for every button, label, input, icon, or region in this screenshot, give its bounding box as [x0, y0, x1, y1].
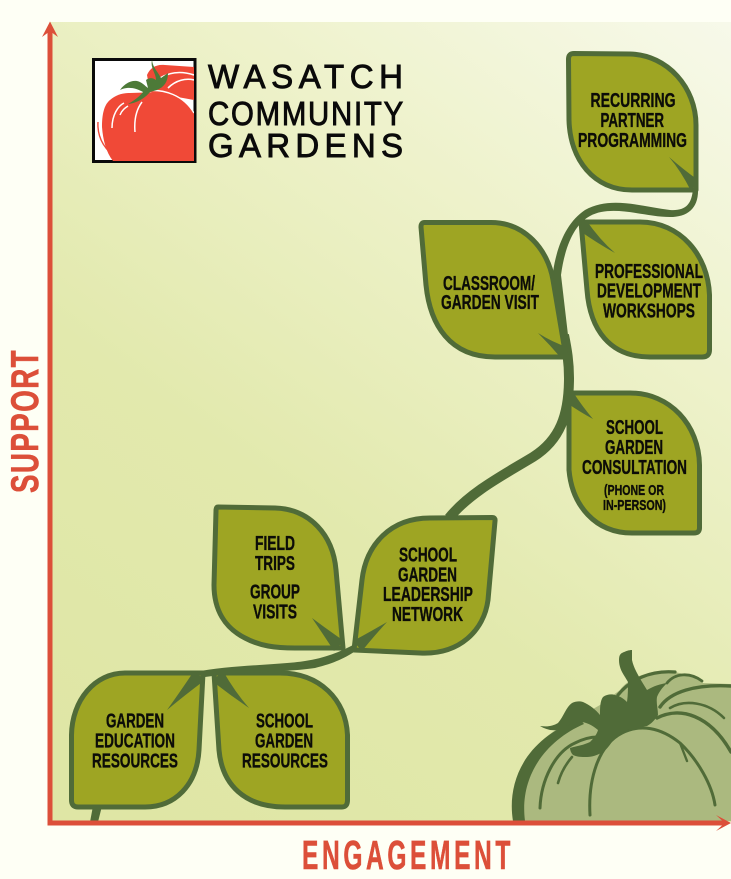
- logo tomato mark: [94, 60, 195, 162]
- leaf: garden education resources: EDUCATION: [95, 730, 175, 752]
- leaf: school garden resources: [212, 671, 348, 807]
- leaf: school garden leadership network: [353, 518, 495, 653]
- leaf: school garden leadership network: SCHOOL: [399, 544, 457, 566]
- leaf: field trips and group visits: [214, 507, 344, 651]
- leaf: field trips and group visits: TRIPS: [255, 553, 295, 575]
- vertical axis arrow: [42, 22, 58, 826]
- leaf: school garden leadership network: GARDEN: [398, 564, 457, 586]
- logo wordmark: COMMUNITY: [208, 95, 405, 132]
- leaf: school garden resources: GARDEN: [255, 730, 313, 752]
- pumpkin ribs and outline: [512, 672, 731, 821]
- pumpkin stem and calyx: [540, 650, 667, 757]
- vine stem: lower connector: [195, 644, 357, 677]
- vine stem: upper connector: [553, 188, 698, 335]
- axis label: support: SUPPORT: [4, 349, 47, 493]
- logo: [94, 58, 405, 164]
- vine stem: middle section to leadership leaf: [449, 335, 569, 518]
- leaf: school garden consultation: SCHOOL: [606, 417, 663, 439]
- leaf: garden education resources: [72, 671, 205, 807]
- leaf: school garden leadership network: NETWORK: [392, 604, 463, 626]
- logo wordmark: [208, 58, 405, 164]
- vine stem: base stub: [90, 806, 102, 822]
- leaf: school garden consultation: [567, 392, 700, 533]
- leaf: school garden resources: SCHOOL: [256, 710, 313, 732]
- leaf: school garden consultation: GARDEN: [605, 437, 663, 459]
- leaf: garden education resources: RESOURCES: [92, 750, 178, 772]
- axis label: engagement: ENGAGEMENT: [302, 832, 514, 878]
- leaf: classroom / garden visit: [421, 222, 567, 358]
- pumpkin body: [513, 671, 731, 821]
- leaf: field trips and group visits: VISITS: [253, 602, 297, 624]
- leaf: recurring partner programming: [568, 54, 698, 191]
- leaf: school garden consultation: (PHONE OR: [604, 483, 664, 499]
- leaf: recurring partner programming: RECURRING: [590, 90, 676, 112]
- horizontal axis arrow: [48, 815, 731, 831]
- logo wordmark: GARDENS: [208, 127, 403, 164]
- leaf: garden education resources: GARDEN: [106, 710, 164, 732]
- logo wordmark: WASATCH: [208, 58, 403, 95]
- leaf: school garden leadership network: LEADERSHIP: [383, 584, 473, 606]
- leaf: recurring partner programming: PROGRAMMING: [578, 130, 687, 152]
- pumpkin illustration: [512, 650, 731, 821]
- leaf: classroom / garden visit: GARDEN VISIT: [441, 292, 539, 314]
- leaf: field trips and group visits: GROUP: [250, 582, 300, 604]
- leaf: field trips and group visits: FIELD: [255, 533, 295, 555]
- leaf: classroom / garden visit: CLASSROOM/: [443, 273, 535, 295]
- leaf: professional development workshops: [580, 220, 710, 357]
- leaf: school garden consultation: IN-PERSON): [603, 498, 666, 514]
- leaf: school garden resources: RESOURCES: [242, 750, 328, 772]
- leaf: recurring partner programming: PARTNER: [600, 110, 664, 132]
